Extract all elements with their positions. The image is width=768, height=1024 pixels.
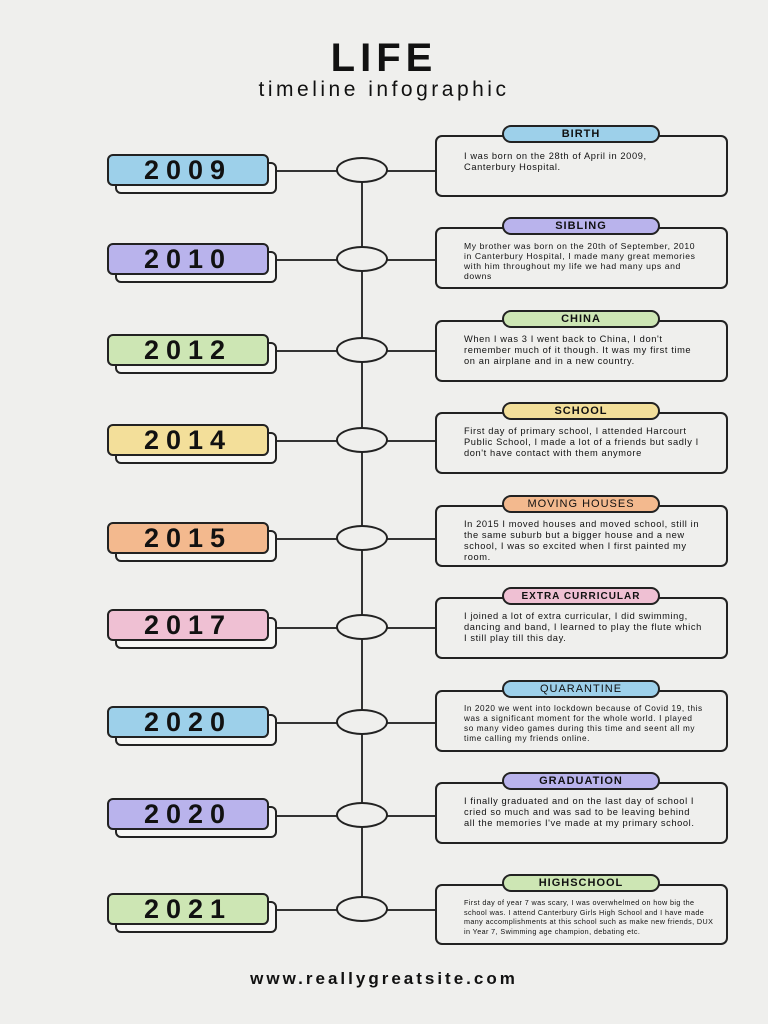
row 2010: 2010 [144,244,232,274]
subtitle: timeline infographic [259,78,509,101]
row 2015: In 2015 I moved houses and moved school, still in the same suburb but a bigger house and a new school, I was so excited when I first painted my room. [464,519,699,562]
row 2010: SIBLING [555,220,607,232]
title: LIFE [331,36,437,80]
row 2021 [107,874,728,945]
row 2017 [107,587,728,659]
row 2015: 2015 [144,523,232,553]
row 2015 [107,495,728,567]
row 2020 quarantine: QUARANTINE [540,683,622,695]
row 2014: SCHOOL [554,405,608,417]
row 2010: My brother was born on the 20th of September, 2010 in Canterbury Hospital, I made many great memories with him throughout my life we had many ups and downs [464,241,696,281]
row 2009: BIRTH [562,128,600,140]
row 2020 graduation: 2020 [144,799,232,829]
timeline vertical line [361,170,363,910]
row 2010 [107,217,728,289]
row 2009: 2009 [144,155,232,185]
row 2020 quarantine [107,680,728,752]
row 2014: 2014 [144,425,232,455]
row 2015: MOVING HOUSES [527,498,635,510]
row 2017: 2017 [144,610,232,640]
row 2021: HIGHSCHOOL [539,877,623,889]
row 2012: 2012 [144,335,232,365]
row 2012: When I was 3 I went back to China, I don't remember much of it though. It was my first time on an airplane and in a new country. [464,334,691,366]
row 2009: I was born on the 28th of April in 2009, Canterbury Hospital. [464,151,647,172]
row 2012: CHINA [561,313,601,325]
footer url: www.reallygreatsite.com [250,969,518,988]
row 2017: EXTRA CURRICULAR [522,591,640,602]
row 2020 graduation [107,772,728,844]
row 2021: First day of year 7 was scary, I was overwhelmed on how big the school was. I attend Canterbury Girls High School and I have made many accomplishments at this school such as make new friends, DUX in Year 7, Swimming age champion, debating etc. [464,898,713,936]
row 2014: First day of primary school, I attended Harcourt Public School, I made a lot of a friends but sadly I don't have contact with them anymore [464,426,699,458]
row 2012 [107,310,728,382]
row 2020 quarantine: 2020 [144,707,232,737]
row 2020 graduation: I finally graduated and on the last day of school I cried so much and was sad to be leaving behind all the memories I've made at my primary school. [464,796,695,828]
row 2009 [107,125,728,197]
row 2014 [107,402,728,474]
row 2020 graduation: GRADUATION [539,775,623,787]
row 2017: I joined a lot of extra curricular, I did swimming, dancing and band, I learned to play the flute which I still play till this day. [464,611,702,643]
row 2021: 2021 [144,894,232,924]
row 2020 quarantine: In 2020 we went into lockdown because of Covid 19, this was a significant moment for the whole world. I played so many video games during this time and seent all my time calling my friends online. [464,704,703,743]
